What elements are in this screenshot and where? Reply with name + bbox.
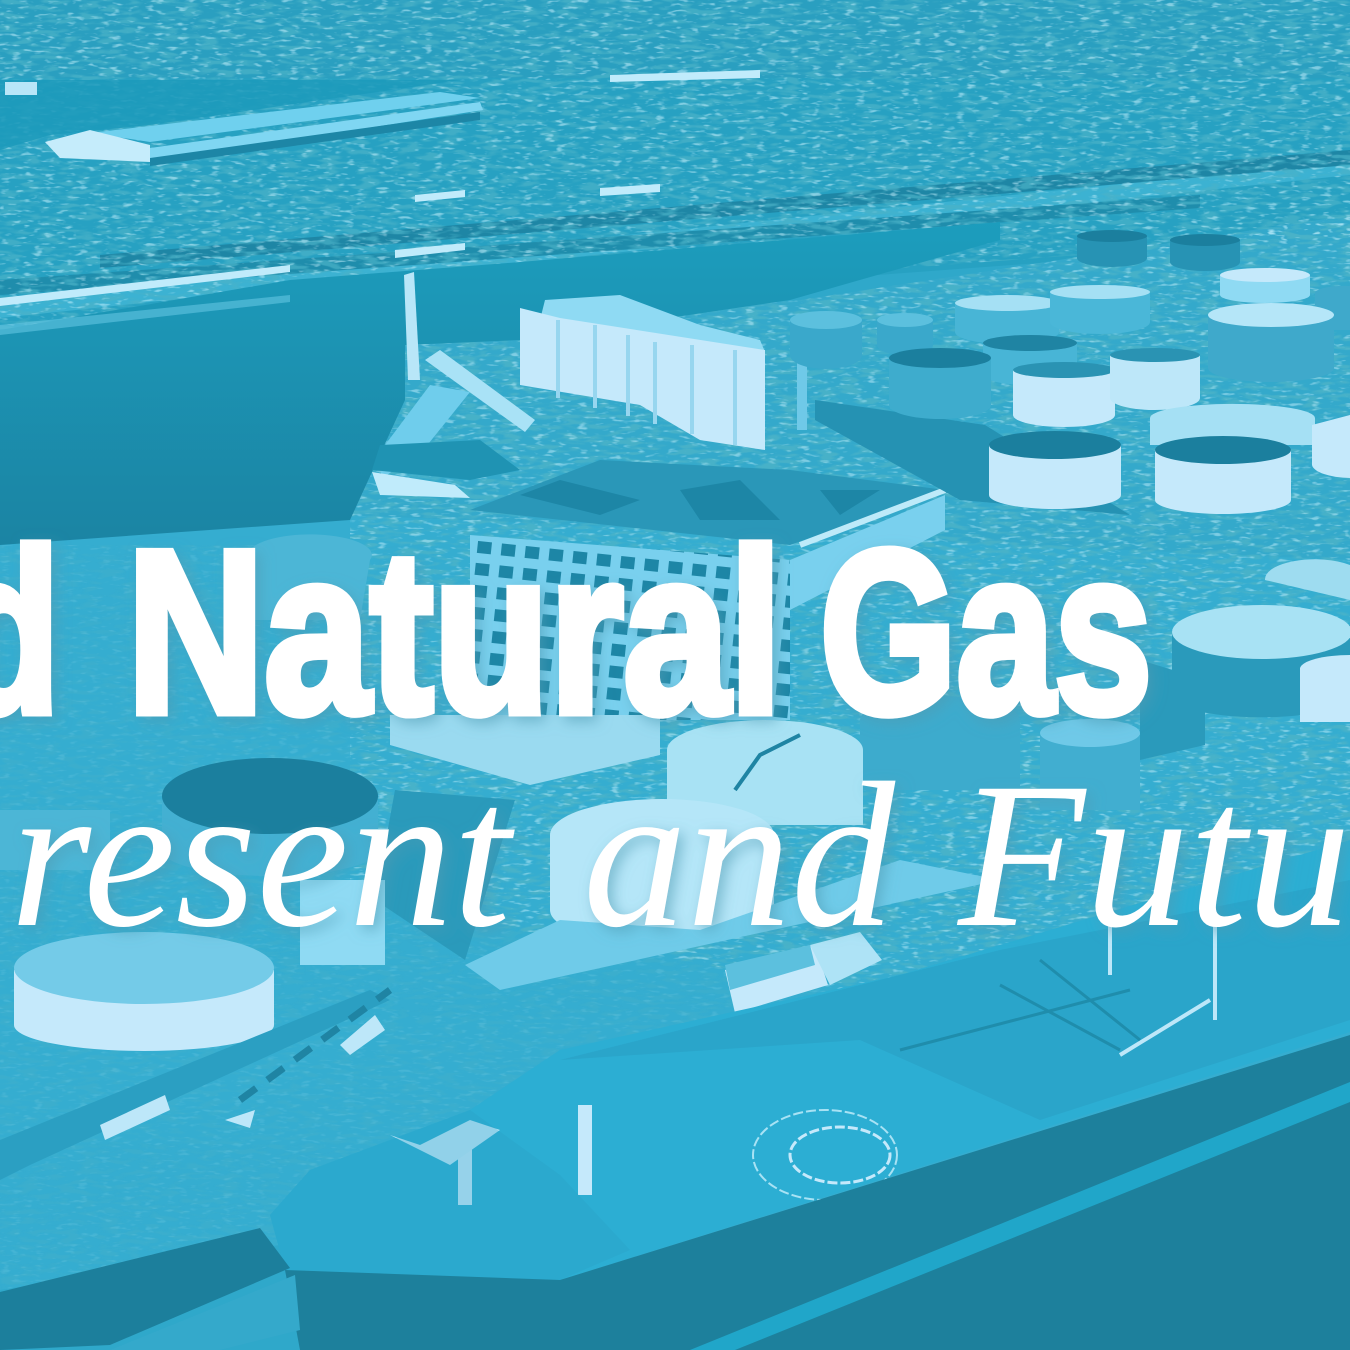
harbour water: [0, 222, 1000, 545]
processing plant building: [470, 335, 945, 720]
storage tanks, upper right: [790, 230, 1350, 514]
tanker superstructure and helipad: [270, 1105, 897, 1280]
subtitle line: present and future: resent: [10, 740, 515, 970]
subtitle line: present and future: Futu: [956, 740, 1350, 970]
storage tanks, left: [0, 758, 385, 1051]
city and rail yard, top: [0, 0, 1350, 340]
reflection of rail cars in water: [0, 295, 290, 335]
image texture, terminal: [350, 217, 1350, 989]
rail cars along the shore: [0, 70, 760, 306]
image texture, lower land: [0, 545, 826, 1288]
pier and walkway at centre: [375, 790, 1000, 990]
tanker deck: [270, 840, 1350, 1280]
road and shore, lower left: [0, 990, 390, 1180]
image texture, city and rail yard: [0, 0, 1350, 340]
subtitle line: present and future: and: [583, 740, 896, 970]
bottom left water: [0, 1228, 290, 1350]
land right of the water: [350, 215, 1350, 560]
grain silos: [520, 295, 765, 450]
title line: Natural Gas: Gas: [820, 503, 1152, 762]
loading jetty: [372, 272, 535, 498]
title line: Natural Gas: Natural: [127, 503, 782, 762]
quay, lower left: [110, 1275, 300, 1350]
small office building: [725, 932, 882, 1013]
title line: Natural Gas: [0, 503, 1152, 762]
lower land: [0, 515, 1350, 1290]
pale tanks at centre: [250, 534, 863, 944]
tanker hull: [285, 1035, 1350, 1350]
storage tanks, middle right: [860, 559, 1350, 810]
tank yard pad: [815, 400, 1130, 515]
warehouse on the far shore: [5, 82, 483, 166]
hull waterline stripe: [690, 1082, 1350, 1350]
